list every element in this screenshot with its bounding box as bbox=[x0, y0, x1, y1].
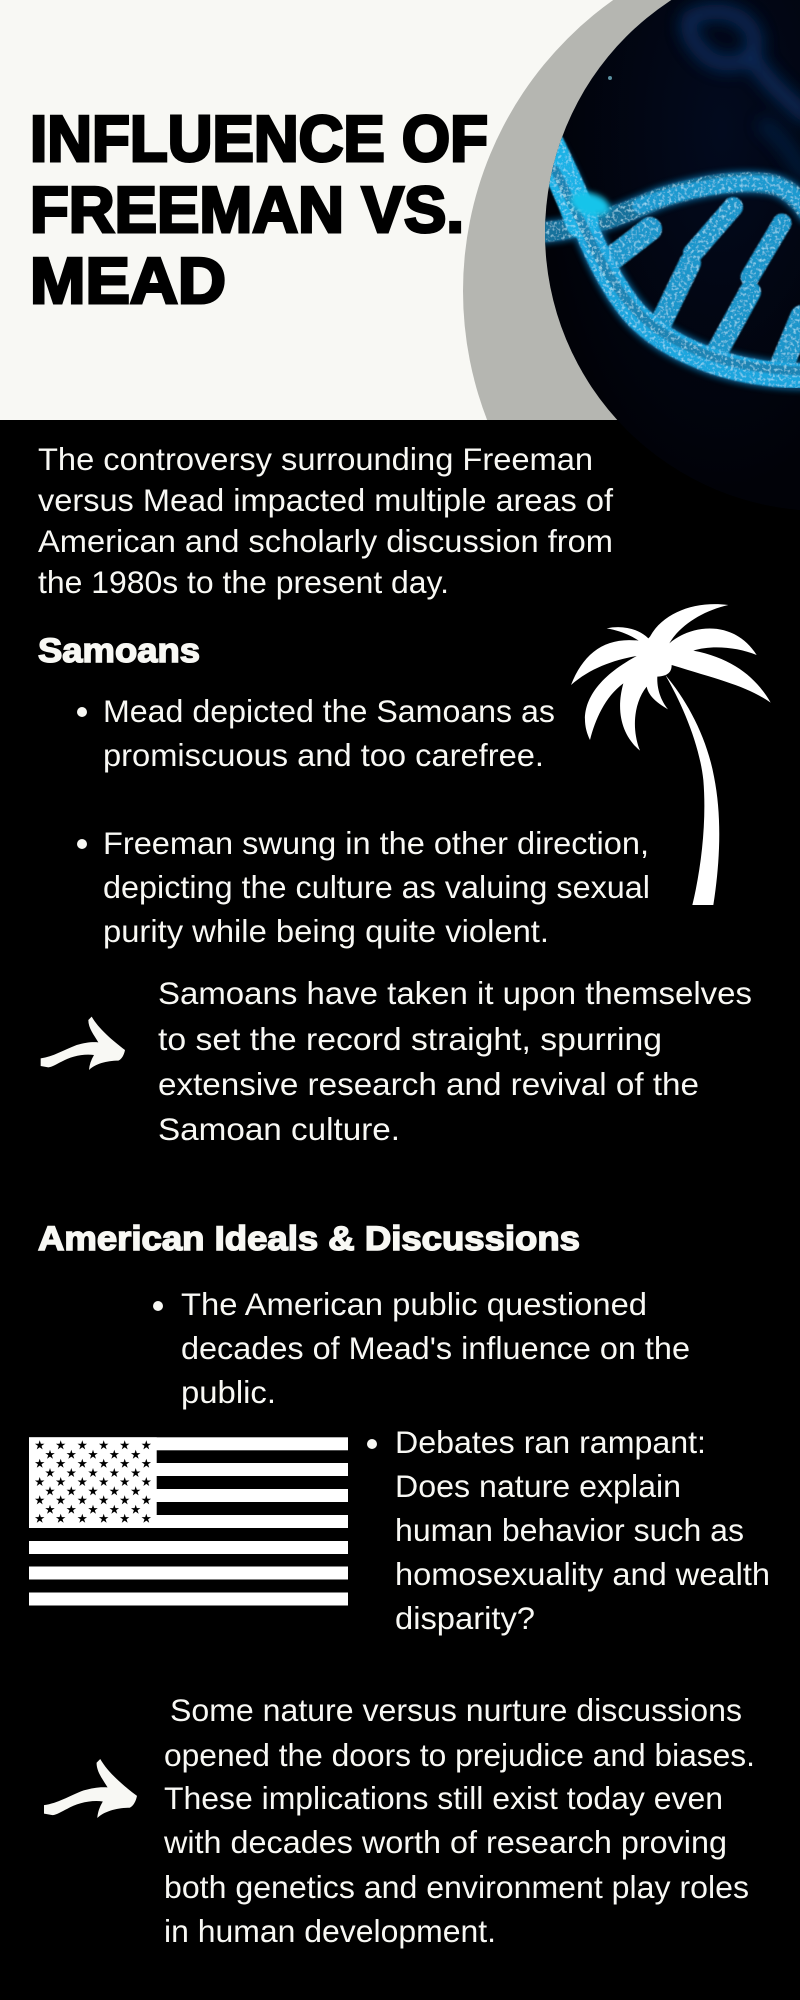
bullet 2 bbox=[77, 825, 650, 949]
front strand bbox=[576, 224, 800, 388]
callout: Samoan response: extensive research and revival of the bbox=[158, 1066, 699, 1102]
intro text: versus Mead impacted multiple areas of bbox=[38, 482, 613, 518]
grey circle bbox=[463, 0, 672, 420]
bullet 1: Mead depicted the Samoans as bbox=[103, 693, 555, 729]
title: INFLUENCE OF bbox=[30, 102, 488, 175]
callout: prejudice and biases: opened the doors to prejudice and biases. bbox=[164, 1737, 755, 1773]
DNA image circle bbox=[540, 0, 800, 520]
icon: American flag bbox=[29, 1437, 348, 1606]
callout: Samoan response: Samoan culture. bbox=[158, 1111, 400, 1147]
intro text: American and scholarly discussion from bbox=[38, 523, 613, 559]
callout: Samoan response bbox=[158, 975, 752, 1147]
callout: prejudice and biases bbox=[163, 1692, 755, 1949]
header panel bbox=[0, 0, 672, 420]
arrow 2 bbox=[44, 1759, 137, 1818]
icon: palm tree bbox=[571, 604, 771, 905]
callout: prejudice and biases: in human development. bbox=[164, 1913, 496, 1949]
bullet: debates: homosexuality and wealth bbox=[395, 1556, 770, 1592]
bullet: debates: Does nature explain bbox=[395, 1468, 681, 1504]
bullet: debates: disparity? bbox=[395, 1600, 535, 1636]
callout: prejudice and biases: both genetics and environment play roles bbox=[164, 1869, 749, 1905]
bullet: American public: The American public questioned bbox=[181, 1286, 647, 1322]
bullet 2: Freeman swung in the other direction, bbox=[103, 825, 649, 861]
callout: prejudice and biases: with decades worth of research proving bbox=[163, 1824, 727, 1860]
bullet: American public bbox=[153, 1286, 690, 1410]
title bbox=[30, 102, 488, 317]
callout: prejudice and biases: These implications still exist today even bbox=[164, 1780, 723, 1816]
title: MEAD bbox=[30, 244, 226, 317]
intro text: the 1980s to the present day. bbox=[38, 564, 449, 600]
bullet: debates bbox=[367, 1424, 770, 1636]
rungs bbox=[610, 207, 800, 365]
bullet: American public: decades of Mead's influence on the bbox=[181, 1330, 690, 1366]
bullet 1: promiscuous and too carefree. bbox=[103, 737, 544, 773]
title: FREEMAN VS. bbox=[30, 173, 464, 246]
bullet: debates: human behavior such as bbox=[395, 1512, 744, 1548]
intro text bbox=[38, 441, 613, 600]
callout: Samoan response: Samoans have taken it upon themselves bbox=[158, 975, 752, 1011]
back strand bbox=[545, 182, 800, 232]
bullets: Samoans bbox=[77, 693, 650, 949]
bullet 2: purity while being quite violent. bbox=[103, 913, 549, 949]
callout: prejudice and biases: Some nature versus nurture discussions bbox=[170, 1692, 742, 1728]
arrow 1 bbox=[41, 1017, 125, 1070]
intro text: The controversy surrounding Freeman bbox=[38, 441, 593, 477]
heading: American Ideals & Discussions: American Ideals & Discussions bbox=[38, 1220, 580, 1258]
bullet 1 bbox=[77, 693, 555, 773]
heading: Samoans: Samoans bbox=[38, 632, 200, 670]
bullet: American public: public. bbox=[181, 1374, 276, 1410]
glow halo bbox=[545, 150, 800, 376]
bullet 2: depicting the culture as valuing sexual bbox=[103, 869, 650, 905]
callout: Samoan response: to set the record straight, spurring bbox=[158, 1021, 662, 1057]
bullet: debates: Debates ran rampant: bbox=[395, 1424, 706, 1460]
